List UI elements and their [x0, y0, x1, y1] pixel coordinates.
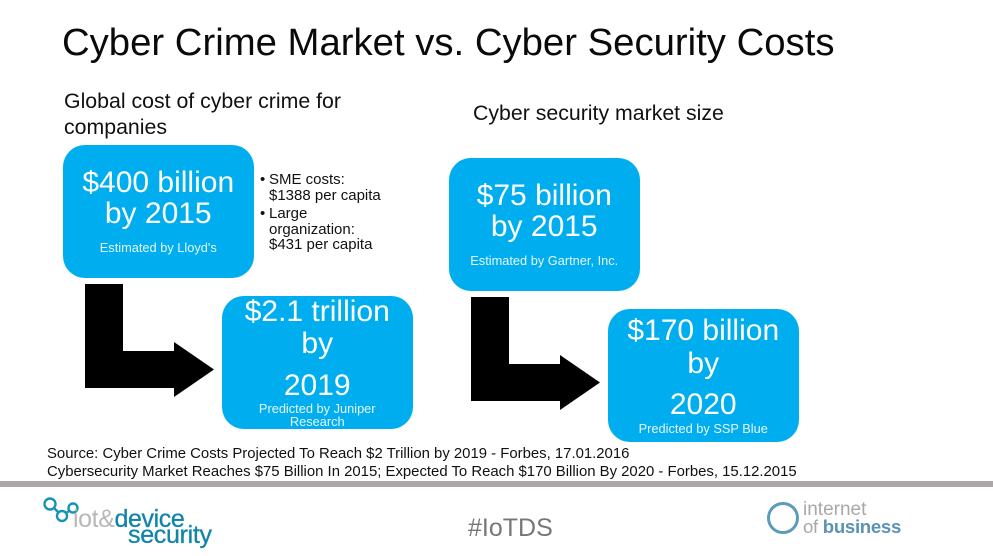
- source citations: [47, 446, 797, 480]
- bullet list: per capita costs: organization:: [269, 220, 355, 238]
- panel: $400 billion by 2015: [63, 145, 254, 278]
- hashtag: #IoTDS: [468, 514, 553, 542]
- panel: $2.1 trillion by 2019: Research: [290, 414, 345, 429]
- arrow: cyber security growth: [471, 297, 600, 410]
- panel: $2.1 trillion by 2019: [222, 296, 412, 429]
- source citations: Source: Cyber Crime Costs Projected To Reach $2 Trillion by 2019 - Forbes, 17.01.2016: [47, 446, 629, 462]
- heading: global cost of cyber crime: companies: [64, 115, 167, 139]
- bullet list: per capita costs: •: [260, 205, 265, 222]
- logo wordmark second line: security: [128, 521, 212, 549]
- footer divider: [0, 481, 993, 487]
- logo wordmark: internet: [803, 499, 866, 520]
- bullet list: per capita costs: [260, 171, 381, 253]
- logo: iot & device security: [43, 497, 212, 549]
- panel: $75 billion by 2015: [449, 158, 640, 291]
- panel: $75 billion by 2015: by 2015: [491, 210, 598, 243]
- panel: $400 billion by 2015: Estimated by Lloyd's: [100, 240, 217, 255]
- source citations: Cybersecurity Market Reaches $75 Billion In 2015; Expected To Reach $170 Billion By 2020 - Forbes, 15.12.2015: [47, 464, 797, 480]
- panel: $400 billion by 2015: $400 billion: [82, 166, 234, 199]
- logo wordmark: iot&device: [73, 505, 184, 533]
- panel: $75 billion by 2015: Estimated by Gartner, Inc.: [470, 253, 618, 268]
- title: Cyber Crime Market vs. Cyber Security Costs: [62, 21, 834, 64]
- logo: internet of business: [767, 499, 901, 537]
- bullet list: per capita costs: $1388 per capita: [269, 186, 381, 204]
- panel: $170 billion by 2020: Predicted by SSP Blue: [639, 421, 768, 436]
- panel: $2.1 trillion by 2019: 2019: [284, 369, 351, 402]
- bullet list: per capita costs: SME costs:: [269, 171, 345, 188]
- panel: $400 billion by 2015: by 2015: [105, 197, 212, 230]
- panel: $2.1 trillion by 2019: by: [301, 327, 333, 360]
- bullet list: per capita costs: Large: [269, 205, 307, 222]
- panel: $170 billion by 2020: by: [687, 347, 719, 380]
- arrow: cyber crime growth: [85, 284, 214, 397]
- icon: linked circles: [43, 497, 79, 522]
- heading: cyber security market size: Cyber security market size: [473, 101, 724, 125]
- icon: ring: [767, 502, 799, 534]
- panel: $170 billion by 2020: $170 billion: [627, 314, 779, 347]
- logo wordmark second line: of business: [803, 516, 901, 537]
- panel: $2.1 trillion by 2019: Predicted by Juniper: [259, 401, 376, 416]
- panel: $75 billion by 2015: $75 billion: [477, 179, 612, 212]
- panel: $170 billion by 2020: [608, 309, 798, 442]
- bullet list: per capita costs: •: [260, 171, 265, 188]
- heading: global cost of cyber crime: [64, 89, 341, 139]
- heading: global cost of cyber crime: Global cost of cyber crime for: [64, 89, 341, 113]
- panel: $2.1 trillion by 2019: $2.1 trillion: [245, 295, 390, 328]
- panel: $170 billion by 2020: 2020: [670, 388, 737, 421]
- bullet list: per capita costs: $431 per capita: [269, 236, 372, 253]
